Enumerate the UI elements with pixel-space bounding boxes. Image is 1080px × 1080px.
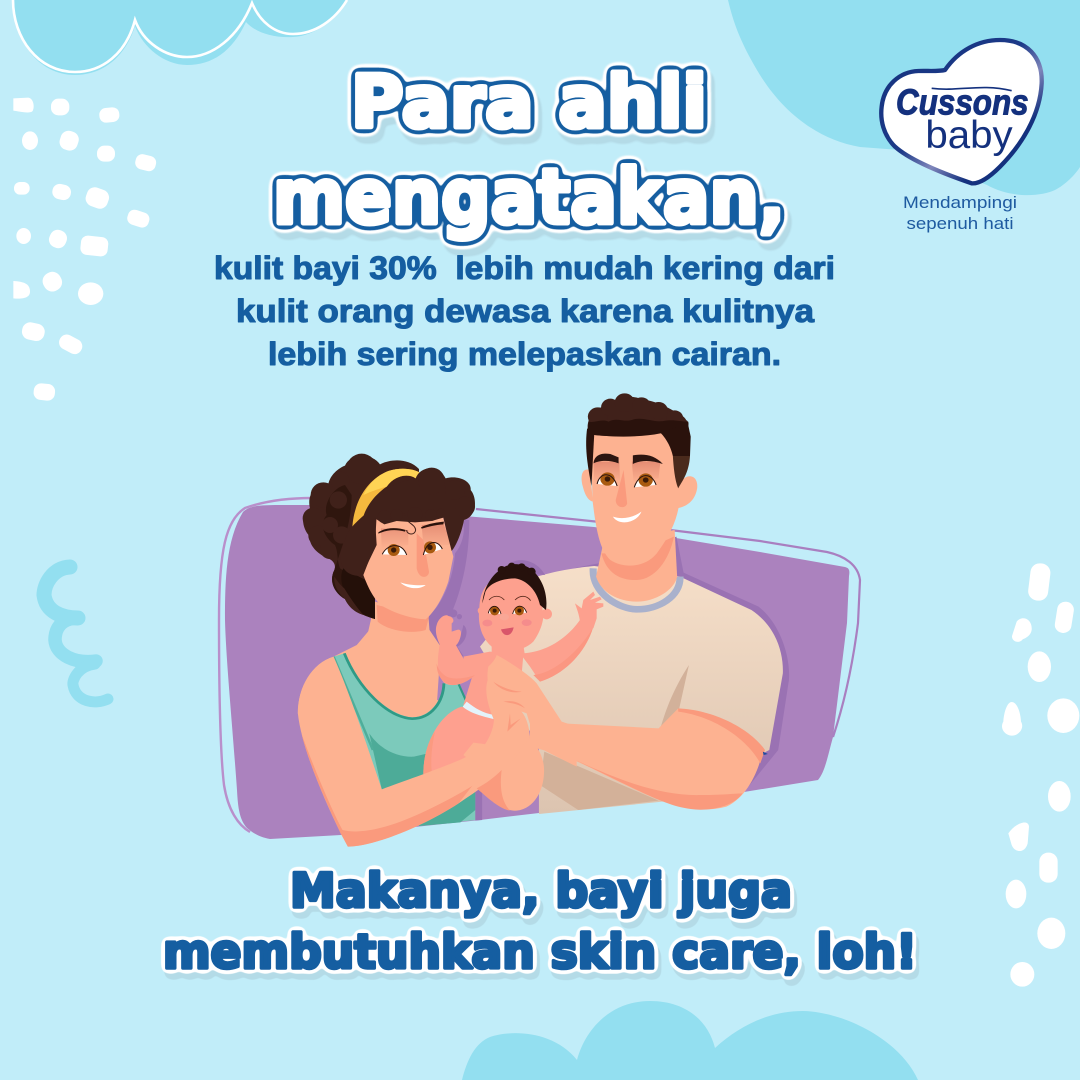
woman lower fist — [477, 737, 544, 811]
woman head close-up — [303, 454, 475, 638]
woman nose — [417, 533, 429, 577]
body text: kulit orang dewasa karena kulitnya — [236, 293, 814, 329]
woman front hair — [340, 468, 475, 576]
woman eyes — [382, 541, 442, 556]
baby torso — [463, 652, 523, 720]
baby left hand — [436, 615, 461, 645]
baby thigh — [423, 707, 507, 774]
man hand — [487, 655, 577, 767]
baby nose and cheeks — [482, 614, 532, 626]
left squiggle — [44, 567, 108, 702]
hands clasped — [420, 655, 577, 813]
bottom cloud — [462, 1001, 918, 1080]
woman neck — [367, 602, 430, 638]
logo tagline: sepenuh hati — [906, 214, 1014, 233]
top-left cloud — [13, 0, 347, 75]
man eyes — [597, 472, 656, 487]
man t-shirt — [480, 566, 783, 814]
logo wave — [932, 88, 1012, 91]
body text: kulit bayi 30% lebih mudah kering dari — [214, 250, 835, 286]
woman headband — [352, 469, 421, 536]
dark purple stripe beside tank — [475, 788, 482, 821]
logo baby: baby — [925, 113, 1013, 157]
baby — [423, 560, 603, 774]
purple brush background — [219, 498, 860, 839]
man eyebrows — [594, 454, 663, 464]
man body shadow — [541, 537, 789, 813]
baby head — [479, 576, 543, 651]
adult arms — [298, 657, 768, 847]
closing statement: Makanya, bayi juga — [290, 864, 792, 919]
woman head shadow — [425, 520, 469, 648]
heart emblem — [881, 40, 1042, 183]
man head — [582, 393, 697, 566]
man smile — [613, 512, 641, 522]
woman eye shading — [381, 523, 452, 549]
woman tank top — [334, 653, 475, 826]
title: Para ahli mengatakan: mengatakan, — [273, 152, 785, 241]
baby ears — [478, 607, 552, 619]
man arm — [530, 708, 768, 810]
woman arm — [298, 657, 530, 847]
woman eyebrows — [378, 522, 444, 534]
woman hand — [420, 678, 530, 813]
logo wordmark: Cussons — [896, 82, 1029, 123]
man nose — [616, 470, 627, 507]
title: Para ahli mengatakan: Para ahli — [351, 60, 707, 144]
top-right blue blob — [728, 0, 1080, 195]
closing statement: membutuhkan skin care, loh! — [163, 925, 917, 980]
man hair — [586, 393, 691, 488]
baby eyes — [488, 606, 527, 615]
right decorative white dots — [1002, 562, 1079, 987]
left decorative white dots — [13, 98, 158, 401]
man neck — [596, 530, 677, 602]
baby hair — [482, 563, 546, 610]
man collar — [593, 568, 680, 609]
baby neck — [492, 645, 525, 656]
baby mouth — [501, 627, 514, 635]
baby right hand — [575, 592, 603, 628]
baby right arm — [520, 620, 593, 682]
body text — [214, 250, 835, 372]
body text: lebih sering melepaskan cairan. — [268, 336, 781, 372]
logo: Cussons baby — [881, 40, 1042, 183]
woman body — [298, 620, 501, 833]
woman back hair — [303, 454, 419, 619]
woman headband highlight — [363, 469, 421, 495]
illustration: parents — [298, 393, 789, 833]
baby hair shadow — [512, 560, 545, 575]
woman forehead curl — [404, 513, 416, 534]
logo tagline — [903, 193, 1017, 233]
baby hand shadow — [449, 609, 467, 658]
baby eyebrows — [489, 596, 531, 601]
logo tagline: Mendampingi — [903, 193, 1017, 212]
man eye shading — [594, 462, 660, 483]
closing statement — [163, 864, 917, 980]
baby left arm — [437, 643, 492, 685]
woman smile — [400, 582, 426, 588]
woman face — [363, 512, 453, 619]
title: Para ahli mengatakan — [273, 60, 785, 241]
baby diaper — [463, 702, 494, 719]
